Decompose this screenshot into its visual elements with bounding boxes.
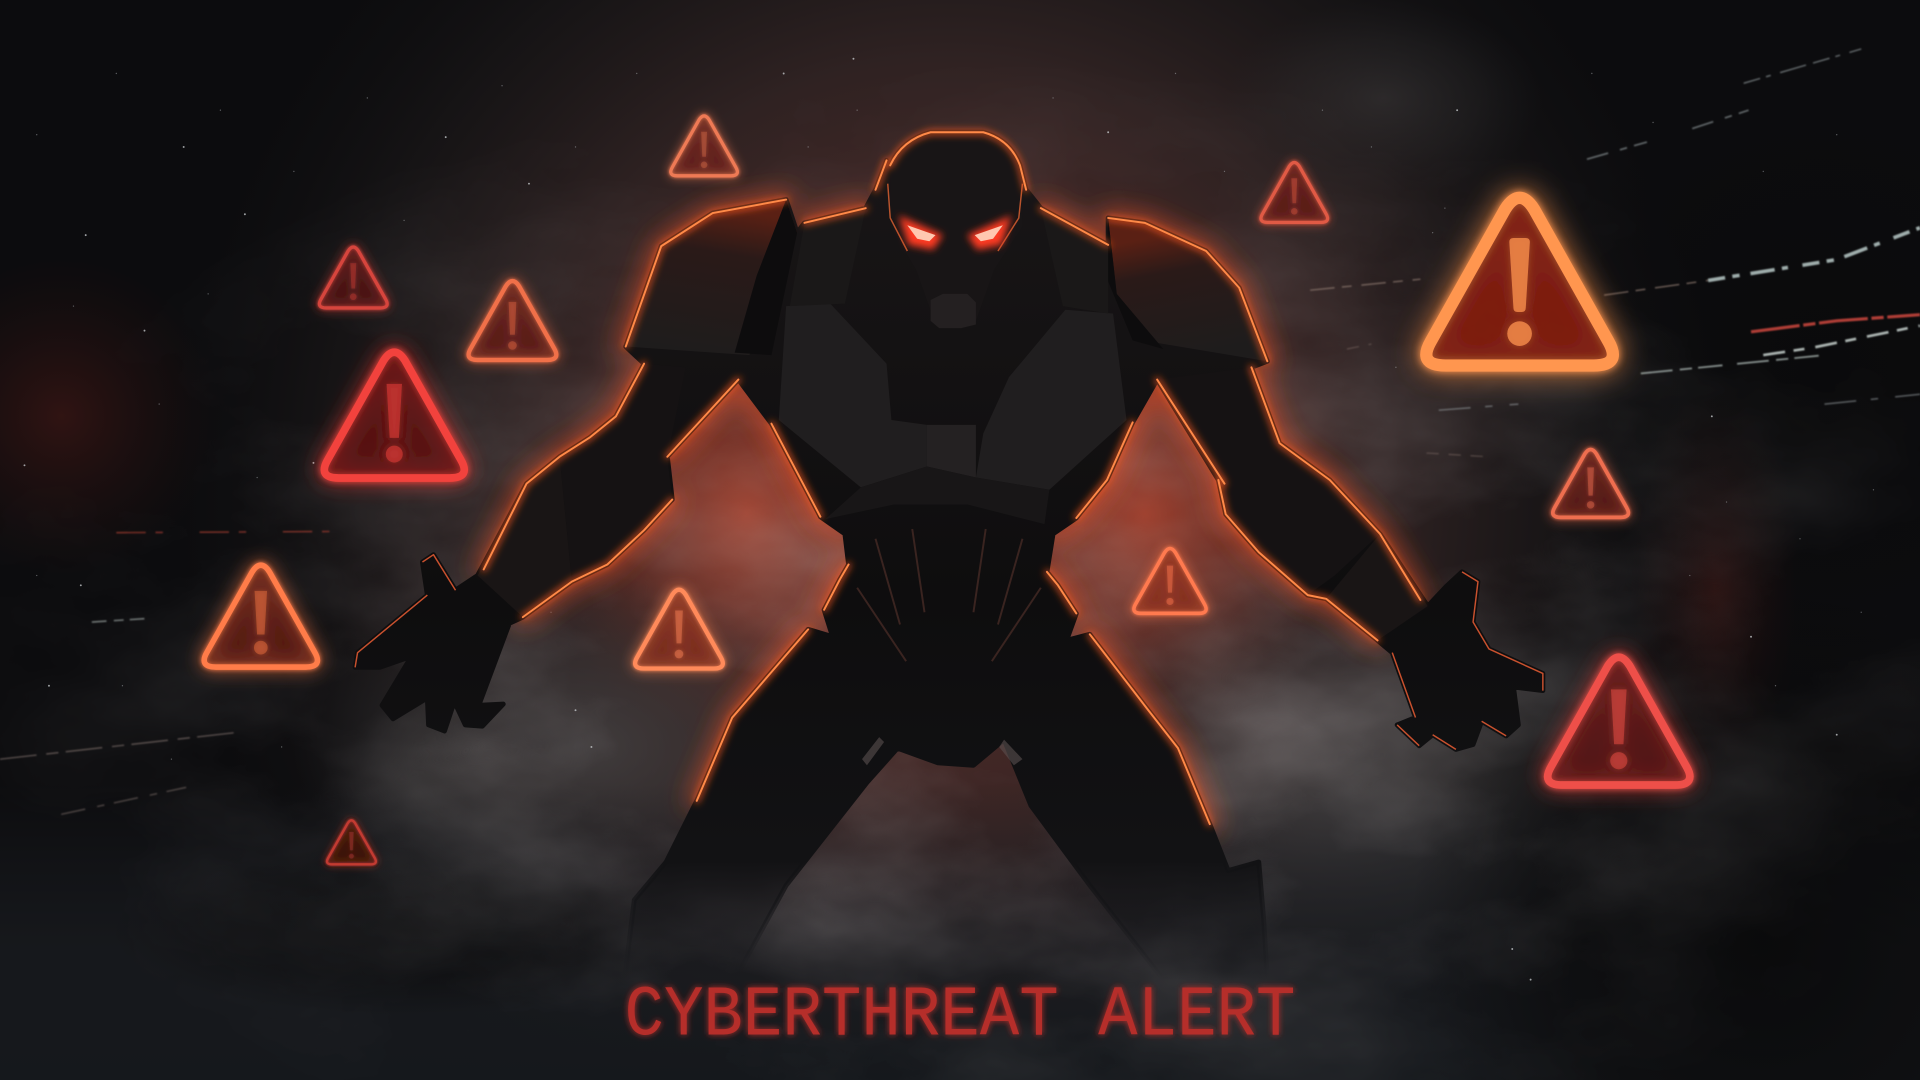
robot silhouette	[355, 132, 1543, 980]
warning triangle: top centre-left	[671, 116, 737, 176]
robot helmet	[888, 132, 1022, 328]
warning triangle: between right arm and torso	[1134, 548, 1206, 613]
robot wide orange aura	[484, 200, 1420, 824]
robot shoulder plates	[626, 200, 1267, 361]
warning triangle: upper left small	[319, 247, 387, 308]
warning triangle: left centre	[469, 281, 556, 360]
warning triangle: between left arm and leg	[635, 590, 723, 668]
warning triangle: far left	[204, 565, 317, 667]
warning triangle: right upper	[1553, 449, 1628, 517]
smoke clouds	[98, 234, 1909, 1080]
warning triangle: top centre-right	[1261, 162, 1328, 222]
robot figure	[355, 132, 1543, 980]
warning triangle: right lower	[1548, 657, 1690, 785]
robot glowing edge lines	[484, 132, 1420, 824]
robot forearm plates	[478, 364, 1428, 640]
robot chest plates	[779, 208, 1127, 524]
data streaks, right side	[1310, 49, 1920, 457]
robot glowing eyes	[899, 216, 1011, 250]
warning triangle: lower left tiny	[327, 820, 376, 864]
data streaks, left side	[0, 531, 343, 814]
title text: CYBERTHREAT ALERT	[624, 977, 1296, 1057]
robot hand edge highlights	[355, 555, 1543, 749]
warning triangle: left large red	[324, 352, 464, 478]
robot pelvis struts	[862, 737, 1022, 765]
warning triangle: large right	[1426, 198, 1613, 365]
robot abdomen struts	[857, 529, 1041, 661]
